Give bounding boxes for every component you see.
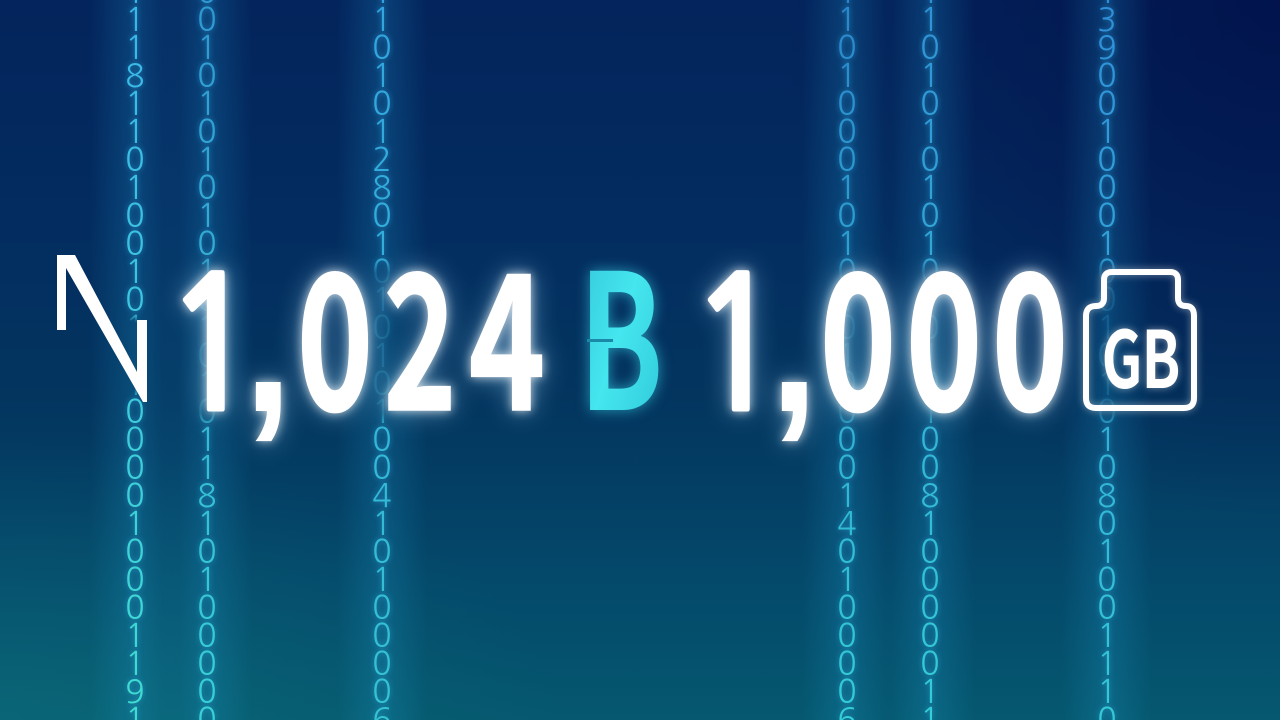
figure: 1,000: 0 xyxy=(906,192,982,465)
figure: 1,000 xyxy=(686,192,1068,465)
figure: 1,000: , xyxy=(770,235,818,453)
icon: GB storage card: B xyxy=(1142,296,1180,411)
icon: GB storage card: G xyxy=(1102,296,1142,411)
figure: 1,024 xyxy=(161,192,545,465)
figure: 1,024: 4 xyxy=(469,192,545,465)
figure: 1,024: , xyxy=(244,235,292,453)
figure: 1,000: 0 xyxy=(992,192,1068,465)
letter B in cyan: B xyxy=(579,192,663,464)
figure: 1,024: 1 xyxy=(161,255,263,439)
figure: 1,024: 0 xyxy=(297,192,373,465)
icon: GB storage card xyxy=(1086,272,1194,411)
figure: 1,000: 1 xyxy=(686,255,788,439)
figure: 1,000: 0 xyxy=(820,192,896,465)
figure: 1,024: 2 xyxy=(383,192,457,464)
icon: angular N symbol xyxy=(57,255,147,402)
